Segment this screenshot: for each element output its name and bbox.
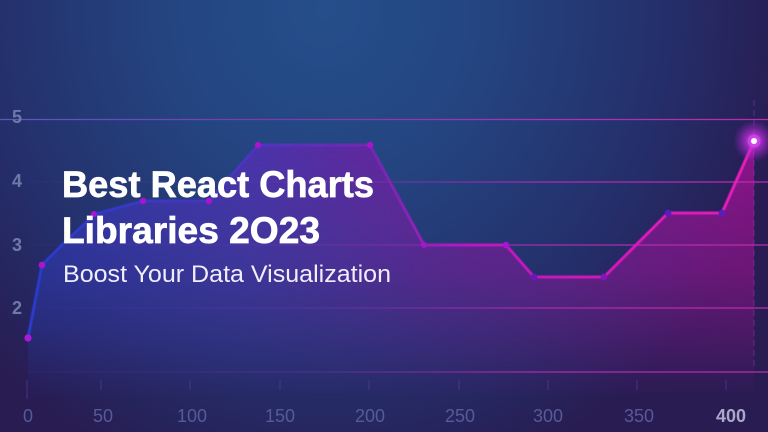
y axis labels: 3 [12, 235, 22, 255]
title: Best React Charts [62, 164, 374, 205]
x axis labels: 50 [93, 406, 113, 426]
x axis labels: 100 [177, 406, 207, 426]
data line [28, 141, 754, 338]
x axis labels: 300 [533, 406, 563, 426]
subtitle: Boost Your Data Visualization [63, 261, 391, 288]
glowing end point [733, 120, 768, 162]
area fill under line [28, 141, 754, 400]
y axis labels [12, 107, 22, 318]
title: Libraries 2O23 [62, 210, 320, 251]
x axis tick marks [27, 380, 726, 399]
x axis labels: 150 [265, 406, 295, 426]
x axis labels: 350 [624, 406, 654, 426]
y axis labels: 2 [12, 298, 22, 318]
x axis labels: 0 [23, 406, 33, 426]
x axis labels: 200 [355, 406, 385, 426]
dashed marker line [753, 100, 755, 368]
y axis labels: 4 [12, 171, 22, 191]
x axis labels: 400 [716, 406, 746, 426]
horizontal grid lines [0, 120, 768, 372]
data point markers [24, 142, 725, 342]
x axis labels: 250 [445, 406, 475, 426]
title [62, 164, 374, 251]
x axis labels [23, 406, 746, 426]
y axis labels: 5 [12, 107, 22, 127]
